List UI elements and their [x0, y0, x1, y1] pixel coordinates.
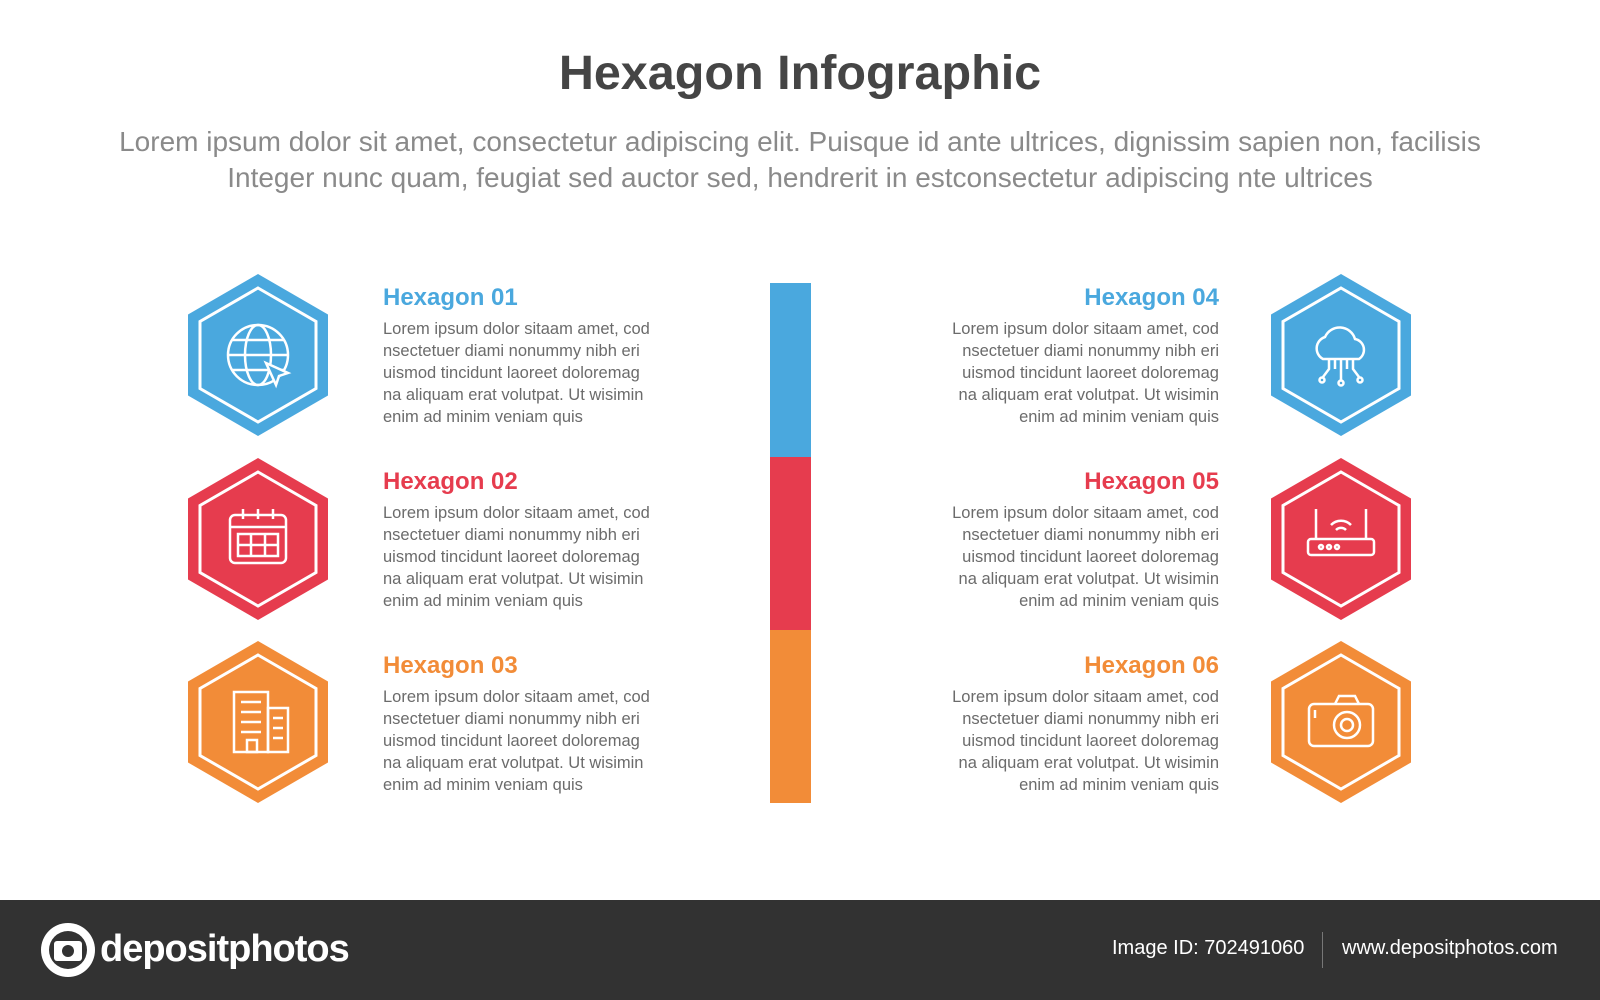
footer url: www.depositphotos.com [1342, 937, 1558, 959]
text block: hexagon 03: uismod tincidunt laoreet doloremag [383, 732, 640, 750]
title: Hexagon Infographic [559, 46, 1041, 100]
text block: hexagon 01: uismod tincidunt laoreet doloremag [383, 364, 640, 382]
text block: hexagon 01: nsectetuer diami nonummy nibh eri [383, 342, 640, 360]
text block: hexagon 04 [952, 284, 1219, 426]
text block: hexagon 02: na aliquam erat volutpat. Ut wisimin [383, 570, 643, 588]
text block: hexagon 02: Hexagon 02 [383, 468, 518, 495]
text block: hexagon 04: enim ad minim veniam quis [1019, 408, 1219, 426]
text block: hexagon 06: na aliquam erat volutpat. Ut wisimin [959, 754, 1219, 772]
text block: hexagon 02: enim ad minim veniam quis [383, 592, 583, 610]
text block: hexagon 03: Hexagon 03 [383, 652, 518, 679]
icon: hexagon 01 globe [188, 274, 328, 436]
footer logo: depositphotos [100, 928, 349, 970]
icon: hexagon 05 router [1271, 458, 1411, 620]
icon: hexagon 03 building [188, 641, 328, 803]
text block: hexagon 06: enim ad minim veniam quis [1019, 776, 1219, 794]
icon: hexagon 02 calendar [188, 458, 328, 620]
footer logo [41, 923, 349, 977]
footer [0, 900, 1600, 1000]
text block: hexagon 04: nsectetuer diami nonummy nibh eri [962, 342, 1219, 360]
subtitle: Integer nunc quam, feugiat sed auctor sed, hendrerit in estconsectetur adipiscing nte ultrices [227, 162, 1373, 193]
text block: hexagon 04: uismod tincidunt laoreet doloremag [962, 364, 1219, 382]
text block: hexagon 06: Lorem ipsum dolor sitaam amet, cod [952, 688, 1219, 706]
text block: hexagon 05 [952, 468, 1219, 610]
text block: hexagon 02: Lorem ipsum dolor sitaam amet, cod [383, 504, 650, 522]
text block: hexagon 01 [383, 284, 650, 426]
text block: hexagon 05: uismod tincidunt laoreet doloremag [962, 548, 1219, 566]
text block: hexagon 04: Lorem ipsum dolor sitaam amet, cod [952, 320, 1219, 338]
text block: hexagon 04: Hexagon 04 [1084, 284, 1219, 311]
text block: hexagon 06: nsectetuer diami nonummy nibh eri [962, 710, 1219, 728]
subtitle: Lorem ipsum dolor sit amet, consectetur adipiscing elit. Puisque id ante ultrices, dignissim sapien non, facilisis [119, 126, 1481, 157]
text block: hexagon 03: nsectetuer diami nonummy nibh eri [383, 710, 640, 728]
text block: hexagon 01: enim ad minim veniam quis [383, 408, 583, 426]
center bar [770, 283, 811, 803]
text block: hexagon 04: na aliquam erat volutpat. Ut wisimin [959, 386, 1219, 404]
text block: hexagon 06 [952, 652, 1219, 794]
text block: hexagon 05: Hexagon 05 [1084, 468, 1219, 495]
subtitle [119, 126, 1481, 193]
icon: hexagon 04 cloud [1271, 274, 1411, 436]
text block: hexagon 02: nsectetuer diami nonummy nibh eri [383, 526, 640, 544]
text block: hexagon 05: nsectetuer diami nonummy nibh eri [962, 526, 1219, 544]
text block: hexagon 05: Lorem ipsum dolor sitaam amet, cod [952, 504, 1219, 522]
text block: hexagon 01: Hexagon 01 [383, 284, 518, 311]
text block: hexagon 03: enim ad minim veniam quis [383, 776, 583, 794]
text block: hexagon 06: uismod tincidunt laoreet doloremag [962, 732, 1219, 750]
text block: hexagon 03: Lorem ipsum dolor sitaam amet, cod [383, 688, 650, 706]
text block: hexagon 05: na aliquam erat volutpat. Ut wisimin [959, 570, 1219, 588]
text block: hexagon 01: Lorem ipsum dolor sitaam amet, cod [383, 320, 650, 338]
text block: hexagon 03 [383, 652, 650, 794]
icon: hexagon 06 camera [1271, 641, 1411, 803]
text block: hexagon 03: na aliquam erat volutpat. Ut wisimin [383, 754, 643, 772]
text block: hexagon 02 [383, 468, 650, 610]
text block: hexagon 05: enim ad minim veniam quis [1019, 592, 1219, 610]
text block: hexagon 02: uismod tincidunt laoreet doloremag [383, 548, 640, 566]
text block: hexagon 01: na aliquam erat volutpat. Ut wisimin [383, 386, 643, 404]
text block: hexagon 06: Hexagon 06 [1084, 652, 1219, 679]
footer image id: Image ID: 702491060 [1112, 937, 1304, 959]
